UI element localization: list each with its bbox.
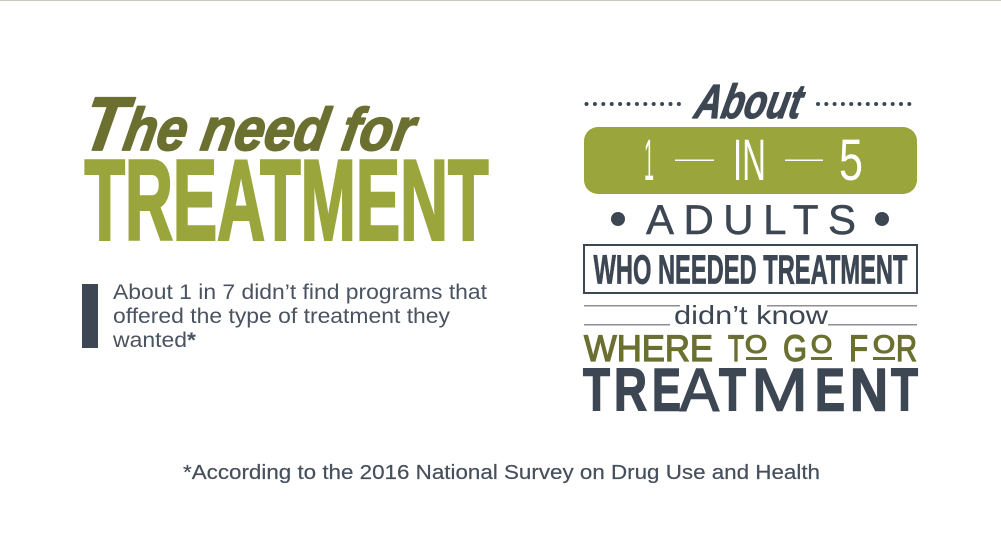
text: where to go for: F [849, 328, 868, 369]
text: TREATMENT: T [719, 356, 746, 424]
left panel: title [77, 83, 488, 265]
heading: The need for: The need for [77, 83, 426, 167]
text: where to go for: R [896, 328, 917, 369]
heading: About: About [690, 75, 809, 129]
text: where to go for: G [783, 328, 807, 369]
text: TREATMENT: R [614, 356, 647, 424]
text: where to go for: O [745, 331, 767, 359]
text: TREATMENT: T [583, 356, 610, 424]
heading: TREATMENT: TREATMENT [84, 136, 488, 264]
callout bar [82, 284, 98, 348]
callout text: About 1 in 7 didn’t find programs that [113, 281, 487, 304]
text: TREATMENT: A [680, 356, 719, 424]
dotted rule left [586, 102, 686, 106]
text: where to go for: WHERE [584, 328, 713, 369]
callout text: offered the type of treatment they [113, 305, 451, 328]
text: where to go for: O [873, 331, 895, 359]
text: TREATMENT: M [751, 356, 808, 424]
text: TREATMENT: T [891, 356, 918, 424]
green banner: 1 in 5: 1 [644, 128, 654, 193]
text: TREATMENT: N [850, 356, 888, 424]
green banner: 1 in 5: 5 [839, 128, 863, 193]
text: where to go for: O [811, 331, 832, 359]
text: TREATMENT [583, 356, 918, 424]
right panel: 1 in 5 adults lockup [583, 75, 918, 424]
text: where to go for: T [728, 328, 744, 369]
left panel: statistic callout [82, 281, 487, 352]
callout text [112, 281, 487, 352]
text: where to go for [584, 328, 917, 369]
text: didn't know with rules: didn’t know [674, 300, 828, 330]
text: ADULTS with bullets: ADULTS [646, 196, 856, 243]
footnote: *According to the 2016 National Survey on Drug Use and Health [183, 462, 820, 484]
callout text: wanted * [112, 329, 197, 352]
text: TREATMENT: E [652, 356, 681, 424]
green banner: 1 in 5 [584, 127, 917, 194]
text: TREATMENT: E [815, 356, 845, 424]
dotted rule right [818, 102, 916, 106]
green banner: 1 in 5: IN [733, 128, 766, 193]
